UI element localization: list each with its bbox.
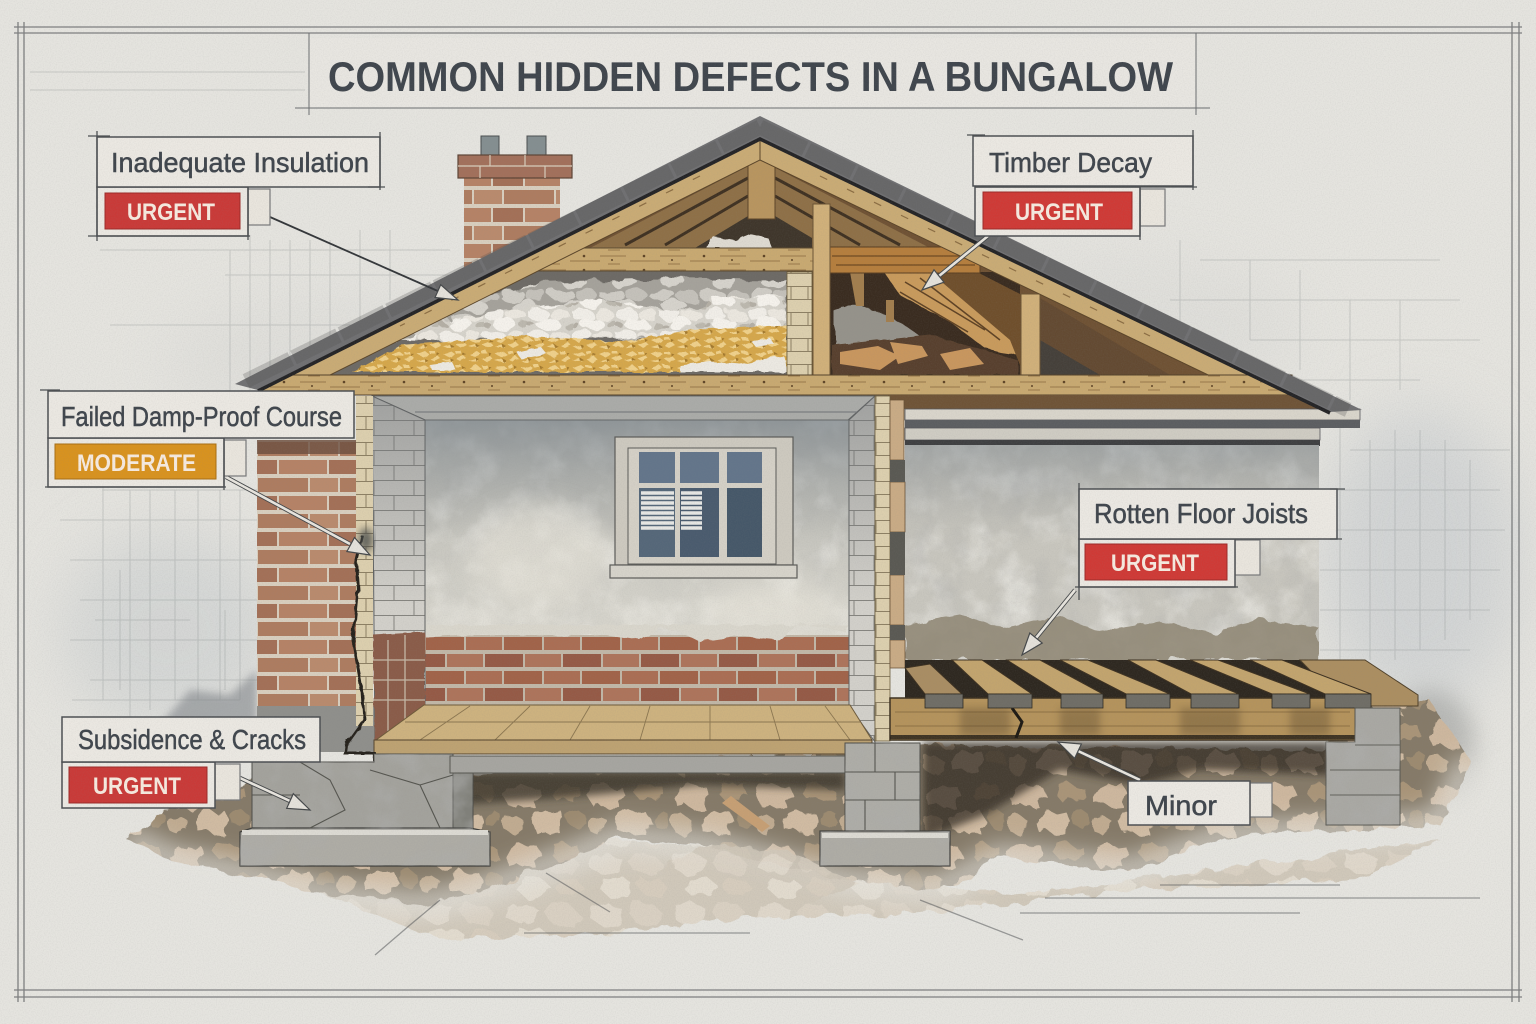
left foundation mottling	[240, 754, 490, 866]
fascia boards	[888, 395, 1325, 409]
callout: minor	[1128, 781, 1272, 825]
right rafter	[760, 136, 1300, 395]
callout: timber decay	[967, 130, 1197, 240]
urgent badge: URGENT	[1015, 199, 1103, 226]
main beam	[890, 698, 1356, 740]
fallen plank	[722, 796, 770, 832]
ground rubble	[125, 700, 1480, 955]
heading: Inadequate Insulation	[111, 147, 369, 178]
arrow: minor	[1058, 742, 1140, 780]
exposed floor joists	[890, 660, 1418, 740]
callout: failed damp-proof course	[40, 390, 354, 490]
urgent badge	[1085, 544, 1227, 580]
left rafter	[262, 136, 760, 385]
urgent badge	[983, 192, 1132, 229]
urgent badge: URGENT	[127, 199, 215, 226]
heading: Failed Damp-Proof Course	[61, 401, 342, 432]
callout: rotten floor joists	[1075, 483, 1345, 600]
window	[610, 437, 797, 578]
room interior	[345, 396, 875, 866]
roof shingles	[235, 116, 1362, 413]
ceiling	[372, 396, 875, 420]
callout: inadequate insulation	[88, 131, 385, 241]
joist planks	[905, 660, 1371, 694]
callout: minor: Minor	[1145, 790, 1217, 821]
collar tie right	[830, 247, 980, 273]
collar tie left	[538, 248, 813, 271]
insulation: dark backing	[310, 270, 787, 375]
right side wall	[849, 396, 875, 742]
dark earth with stones	[125, 700, 1470, 905]
dark hollow under the deck	[923, 742, 1330, 840]
centre foundation mottling	[820, 743, 950, 866]
right pier mottling	[1326, 728, 1400, 825]
floor	[374, 705, 872, 754]
callout: subsidence and cracks	[62, 717, 320, 808]
upper attic boarding	[590, 160, 930, 248]
heading: Timber Decay	[989, 147, 1152, 178]
insulation: grey fibre	[395, 279, 787, 342]
decayed attic void	[830, 272, 1020, 375]
outer deck edge	[1300, 660, 1418, 706]
roof and attic cross-section	[262, 136, 1300, 395]
joist end grain	[925, 694, 1371, 708]
pale plates behind rubble	[300, 840, 1440, 940]
tie beam	[262, 375, 1292, 395]
right attic boarding	[1040, 298, 1170, 375]
chimney	[458, 136, 572, 270]
heading: Rotten Floor Joists	[1094, 498, 1308, 529]
insulation puffs above tie	[705, 234, 772, 248]
pale plates over the rubble	[660, 845, 860, 910]
damp patch	[359, 528, 373, 552]
ground crack strokes	[375, 873, 1480, 955]
background ink washes	[60, 260, 1520, 800]
title: COMMON HIDDEN DEFECTS IN A BUNGALOW	[328, 53, 1173, 100]
soft fade along the lower rubble edge	[125, 760, 1470, 905]
arrow: floor joists	[1022, 590, 1075, 655]
attic timber backing	[310, 150, 1250, 385]
tan brick column left	[356, 396, 373, 726]
right lean-to wall and fascia	[875, 395, 1360, 741]
floor slab	[450, 756, 845, 773]
urgent badge: URGENT	[1111, 550, 1199, 577]
foundations	[240, 708, 1400, 866]
arrow: subsidence	[240, 778, 310, 810]
left side wall	[372, 396, 425, 745]
vertical posts	[787, 272, 812, 376]
heading: Subsidence & Cracks	[78, 724, 306, 755]
beam stains	[960, 708, 1330, 736]
insulation: white fibre	[405, 296, 785, 342]
dark void	[905, 660, 1360, 700]
centre pier	[845, 743, 920, 831]
left brick pier	[257, 440, 377, 752]
tan brick column	[875, 396, 890, 741]
arrow: damp-proof course	[226, 477, 370, 555]
centre footing	[820, 831, 950, 866]
insulation: white specks in yellow	[430, 338, 787, 372]
damp stain at wall base	[905, 615, 1319, 660]
lean-to wall plaster	[905, 445, 1319, 660]
left footing	[240, 828, 490, 866]
moderate badge: MODERATE	[77, 450, 196, 477]
back wall plaster	[426, 420, 848, 635]
collapsed rotten timber	[884, 268, 1020, 355]
title block	[295, 33, 1210, 115]
window blinds	[641, 493, 702, 528]
orange blocks	[890, 400, 905, 668]
structural crack	[345, 535, 380, 866]
dark hollow under the slab	[455, 772, 845, 805]
urgent badge	[69, 767, 207, 803]
arrow: inadequate insulation	[270, 217, 458, 300]
insulation: yellow fibre	[352, 325, 787, 372]
moderate badge	[55, 444, 216, 479]
left foundation block	[252, 754, 453, 828]
blueprint grid lines	[30, 72, 1510, 720]
king post	[748, 157, 775, 219]
urgent badge: URGENT	[93, 773, 181, 800]
exposed brick band	[425, 635, 849, 706]
right pier	[1326, 708, 1400, 825]
window panes	[639, 452, 762, 557]
peeling plaster edge	[425, 622, 849, 642]
arrow: timber decay	[922, 236, 988, 290]
urgent badge	[105, 193, 240, 229]
cavity above collar tie	[695, 216, 812, 248]
